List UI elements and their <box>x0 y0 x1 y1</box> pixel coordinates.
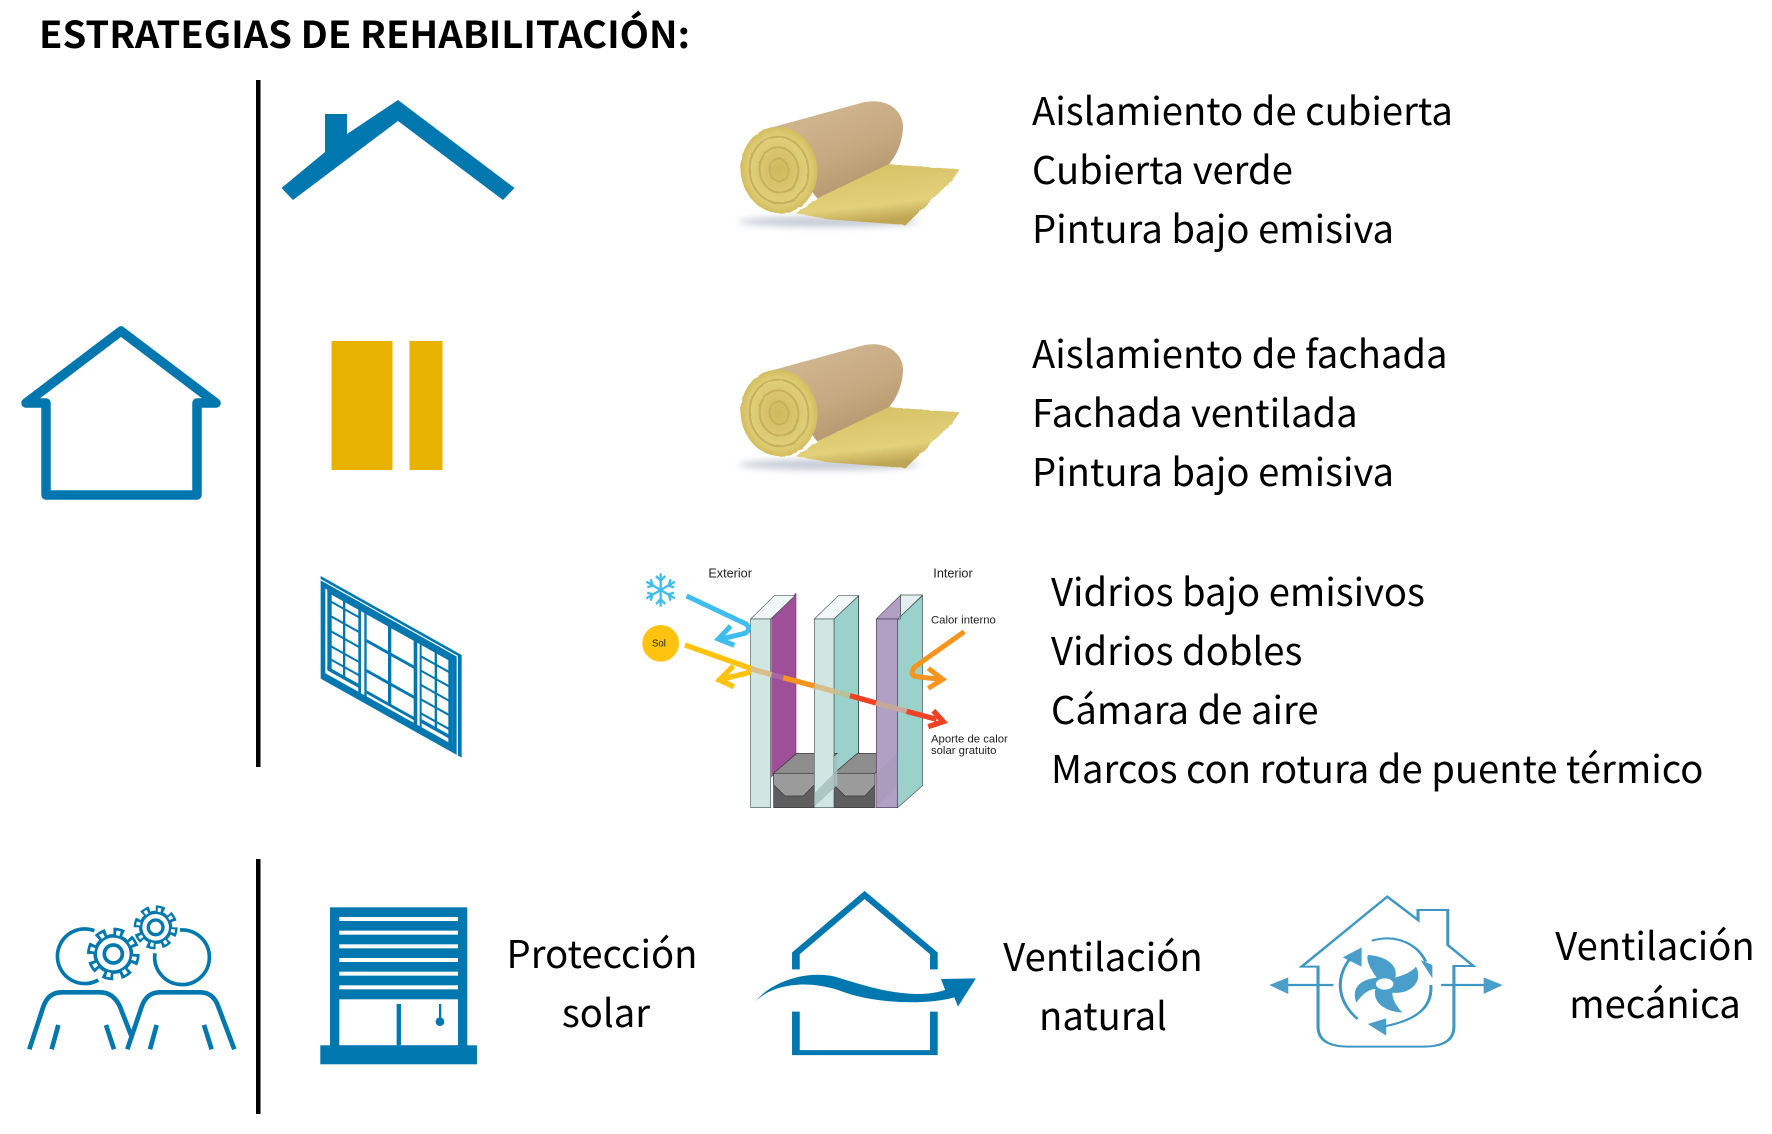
wool end <box>735 122 823 218</box>
title: ESTRATEGIAS DE REHABILITACIÓN: <box>39 5 690 59</box>
head right <box>155 930 209 985</box>
icon: house outline <box>26 331 216 495</box>
text block: roof strategies: Cubierta verde <box>1032 141 1293 196</box>
body left <box>29 992 132 1049</box>
icon: mechanical ventilation <box>1269 897 1503 1047</box>
label: ventilación mecánica: mecánica <box>1569 975 1741 1030</box>
text block: window strategies: Vidrios dobles <box>1051 622 1302 677</box>
cold arrow <box>687 596 749 645</box>
text block: facade strategies: Aislamiento de fachada <box>1032 325 1448 380</box>
image: insulation roll, roof <box>735 101 960 227</box>
internal heat label: Calor interno <box>931 615 996 627</box>
label: protección solar: solar <box>562 984 650 1039</box>
icon: people with gears <box>29 909 234 1049</box>
divider: lower vertical line <box>256 859 260 1114</box>
glass panes <box>751 593 923 808</box>
shadow <box>739 459 919 470</box>
body right <box>127 992 234 1049</box>
text block: roof strategies: Pintura bajo emisiva <box>1032 200 1394 255</box>
text block: facade strategies: Fachada ventilada <box>1032 384 1358 439</box>
spacers <box>774 753 897 808</box>
text block: roof strategies <box>1032 82 1453 255</box>
wool end <box>735 365 823 461</box>
solar beam through the glass <box>751 669 943 727</box>
unrolled mat <box>796 407 960 468</box>
icon: window with solar shutter <box>320 907 477 1064</box>
internal heat arrow <box>912 632 964 688</box>
text block: facade strategies: Pintura bajo emisiva <box>1032 443 1394 498</box>
divider: upper vertical line <box>256 80 260 767</box>
label: ventilación natural: natural <box>1039 987 1167 1042</box>
interior label: Interior <box>933 567 973 581</box>
gear large <box>91 932 135 976</box>
text block: window strategies <box>1051 563 1703 795</box>
head left <box>57 929 98 984</box>
image: insulation roll, facade <box>735 344 960 470</box>
text block: roof strategies: Aislamiento de cubierta <box>1032 82 1453 137</box>
label: ventilación natural: Ventilación <box>1003 928 1203 983</box>
kraft cylinder <box>762 344 903 441</box>
text block: window strategies: Marcos con rotura de puente térmico <box>1051 740 1703 795</box>
icon: roof with chimney <box>282 100 514 200</box>
gear small <box>137 909 174 946</box>
label: protección solar: Protección <box>507 925 697 980</box>
shadow <box>739 216 919 227</box>
label: ventilación mecánica <box>1555 917 1755 1030</box>
label: ventilación mecánica: Ventilación <box>1555 917 1755 972</box>
icon: snowflake <box>646 573 675 607</box>
icon: natural ventilation <box>755 895 976 1053</box>
solar gain label <box>931 734 1008 757</box>
label: ventilación natural <box>1003 928 1203 1042</box>
icon: facade yellow bars <box>332 341 442 470</box>
diagram: triple glazing <box>642 567 1008 808</box>
text block: facade strategies <box>1032 325 1448 498</box>
arms <box>52 1025 212 1049</box>
kraft cylinder <box>762 101 903 198</box>
reflected solar arrow <box>685 645 751 687</box>
text block: window strategies: Cámara de aire <box>1051 681 1319 736</box>
text block: window strategies: Vidrios bajo emisivos <box>1051 563 1425 618</box>
solar gain label: solar gratuito <box>931 745 996 757</box>
icon: isometric window <box>321 576 462 758</box>
unrolled mat <box>796 164 960 225</box>
sun: Sol <box>652 639 666 650</box>
exterior label: Exterior <box>708 567 752 581</box>
solar gain label: Aporte de calor <box>931 734 1008 746</box>
sun <box>642 625 679 662</box>
label: protección solar <box>507 925 697 1039</box>
